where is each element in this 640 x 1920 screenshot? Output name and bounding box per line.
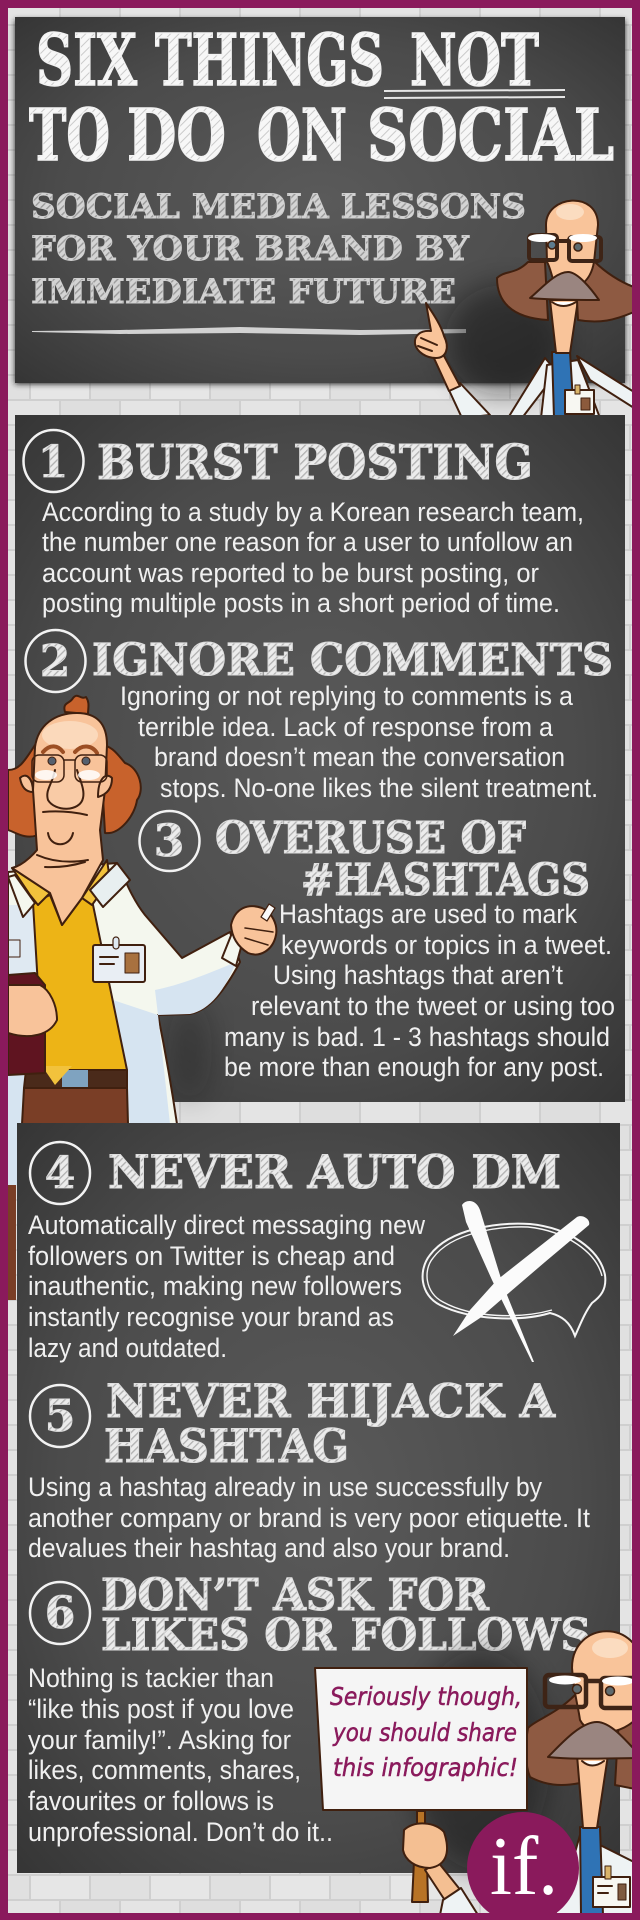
lesson 1 heading: BURST POSTING — [97, 435, 533, 491]
panel: lessons 1 to 3 chalkboard — [15, 415, 625, 1102]
lesson 4 text: Automatically direct messaging new — [28, 1210, 426, 1240]
belt and trousers — [8, 1066, 128, 1300]
lesson 6 heading: LIKES OR FOLLOWS — [101, 1610, 591, 1661]
panel: title chalkboard — [15, 17, 625, 384]
subtitle: SOCIAL MEDIA LESSONS — [31, 187, 526, 227]
lesson 6 text: your family!”. Asking for — [28, 1725, 291, 1755]
lesson 6 text: unprofessional. Don’t do it.. — [28, 1817, 333, 1847]
lesson 4 text: instantly recognise your brand as — [28, 1302, 394, 1332]
lesson 2 text: Ignoring or not replying to comments is a — [120, 681, 573, 711]
title: SIX — [36, 18, 138, 102]
lesson 3 text: many is bad. 1 - 3 hashtags should — [224, 1022, 610, 1052]
collars — [8, 860, 130, 917]
lesson 4 text — [28, 1210, 426, 1363]
shadow — [410, 1650, 550, 1870]
shadow — [445, 285, 565, 395]
logo: if. circle — [467, 1812, 579, 1920]
lesson 6 text: likes, comments, shares, — [28, 1755, 301, 1785]
sign text: you should share — [332, 1718, 517, 1747]
lesson 4 number: 4 — [45, 1148, 75, 1199]
lesson 1 number: 1 — [38, 437, 68, 488]
subtitle: IMMEDIATE FUTURE — [31, 272, 456, 312]
subtitle — [31, 187, 526, 312]
folder and holding hand — [8, 973, 57, 1075]
lesson 2 number: 2 — [40, 636, 70, 687]
lesson 6 text — [28, 1663, 333, 1847]
title — [29, 18, 614, 177]
id badge — [93, 937, 145, 982]
title: TO — [29, 93, 110, 177]
lesson 5 number — [30, 1385, 90, 1447]
lesson 4 number — [30, 1142, 90, 1204]
lesson 1 text: the number one reason for a user to unfollow an — [42, 527, 573, 557]
lesson 3 number: 3 — [154, 816, 184, 867]
title: ON — [257, 93, 347, 177]
pointing hand — [415, 303, 447, 358]
chalk hand — [222, 904, 276, 966]
lesson 3 heading — [215, 813, 590, 906]
lesson 6 text: favourites or follows is — [28, 1786, 274, 1816]
lesson 3 text — [224, 899, 615, 1082]
title: NOT — [410, 18, 539, 102]
lesson 6 number: 6 — [45, 1588, 75, 1639]
icon: crossed-out speech bubble — [423, 1201, 605, 1362]
lesson 4 text: lazy and outdated. — [28, 1333, 227, 1363]
lesson 4 text: followers on Twitter is cheap and — [28, 1241, 395, 1271]
lesson 6 text: Nothing is tackier than — [28, 1663, 274, 1693]
lesson 1 text: posting multiple posts in a short period of time. — [42, 588, 560, 618]
lesson 5 heading: HASHTAG — [104, 1419, 349, 1473]
lesson 2 text: brand doesn’t mean the conversation — [154, 742, 565, 772]
lesson 1 text — [42, 497, 584, 618]
title: THINGS — [155, 18, 384, 102]
holding hand and arm — [403, 1823, 478, 1915]
lesson 4 text: inauthentic, making new followers — [28, 1271, 402, 1301]
lesson 5 heading: NEVER HIJACK A — [106, 1374, 556, 1428]
sign text: this infographic! — [333, 1753, 518, 1782]
lesson 1 text: According to a study by a Korean research team, — [42, 497, 584, 527]
lesson 3 text: Hashtags are used to mark — [279, 899, 578, 929]
character: bald professor holding sign — [315, 1631, 640, 1920]
lesson 1 text: account was reported to be burst posting, or — [42, 558, 539, 588]
sign text — [330, 1682, 522, 1782]
logo: if. circle: if. — [490, 1820, 558, 1913]
lesson 2 number — [26, 630, 86, 692]
lesson 2 text — [120, 681, 598, 803]
lesson 2 text: stops. No-one likes the silent treatment. — [160, 773, 598, 803]
lesson 2 heading: IGNORE COMMENTS — [92, 635, 613, 686]
lesson 3 text: Using hashtags that aren’t — [273, 960, 564, 990]
hair and neck — [526, 1631, 640, 1828]
lesson 6 number — [30, 1582, 90, 1644]
coat and arms — [433, 352, 634, 418]
head and neck — [12, 713, 112, 925]
hair — [8, 696, 141, 837]
lesson 5 heading — [104, 1374, 556, 1473]
coat — [556, 1826, 632, 1913]
title double underline — [384, 90, 565, 98]
character: curly-haired professor with chalk — [8, 696, 276, 1300]
character: bald professor pointing — [415, 201, 634, 418]
lesson 2 text: terrible idea. Lack of response from a — [138, 712, 553, 742]
lesson 5 text: another company or brand is very poor etiquette. It — [28, 1503, 591, 1533]
lesson 5 text — [28, 1472, 591, 1563]
chalk line — [32, 327, 466, 335]
lesson 3 text: keywords or topics in a tweet. — [281, 930, 612, 960]
lesson 3 number — [140, 811, 200, 871]
lesson 3 text: relevant to the tweet or using too — [251, 991, 615, 1021]
lesson 4 heading: NEVER AUTO DM — [108, 1145, 561, 1199]
lesson 3 heading: #HASHTAGS — [301, 855, 590, 906]
sign pole — [412, 1811, 428, 1902]
neck and face — [497, 201, 634, 353]
lab coat — [8, 863, 240, 1185]
lesson 6 heading: DON’T ASK FOR — [101, 1570, 489, 1621]
shadow — [168, 1000, 212, 1100]
lesson 5 number: 5 — [45, 1391, 75, 1442]
yellow shirt — [33, 895, 127, 1070]
lesson 3 text: be more than enough for any post. — [224, 1052, 604, 1082]
sign text: Seriously though, — [330, 1682, 522, 1711]
lesson 1 number — [24, 430, 84, 492]
lesson 3 heading: OVERUSE OF — [215, 813, 526, 864]
lesson 6 text: “like this post if you love — [28, 1694, 294, 1724]
lesson 6 heading — [101, 1570, 591, 1661]
lesson 5 text: Using a hashtag already in use successfully by — [28, 1472, 543, 1502]
sign — [315, 1668, 527, 1810]
lesson 5 text: devalues their hashtag and also your brand. — [28, 1533, 510, 1563]
panel: lessons 4 to 6 chalkboard — [17, 1123, 620, 1873]
title: DO — [127, 93, 226, 177]
subtitle: FOR YOUR BRAND BY — [31, 229, 470, 269]
